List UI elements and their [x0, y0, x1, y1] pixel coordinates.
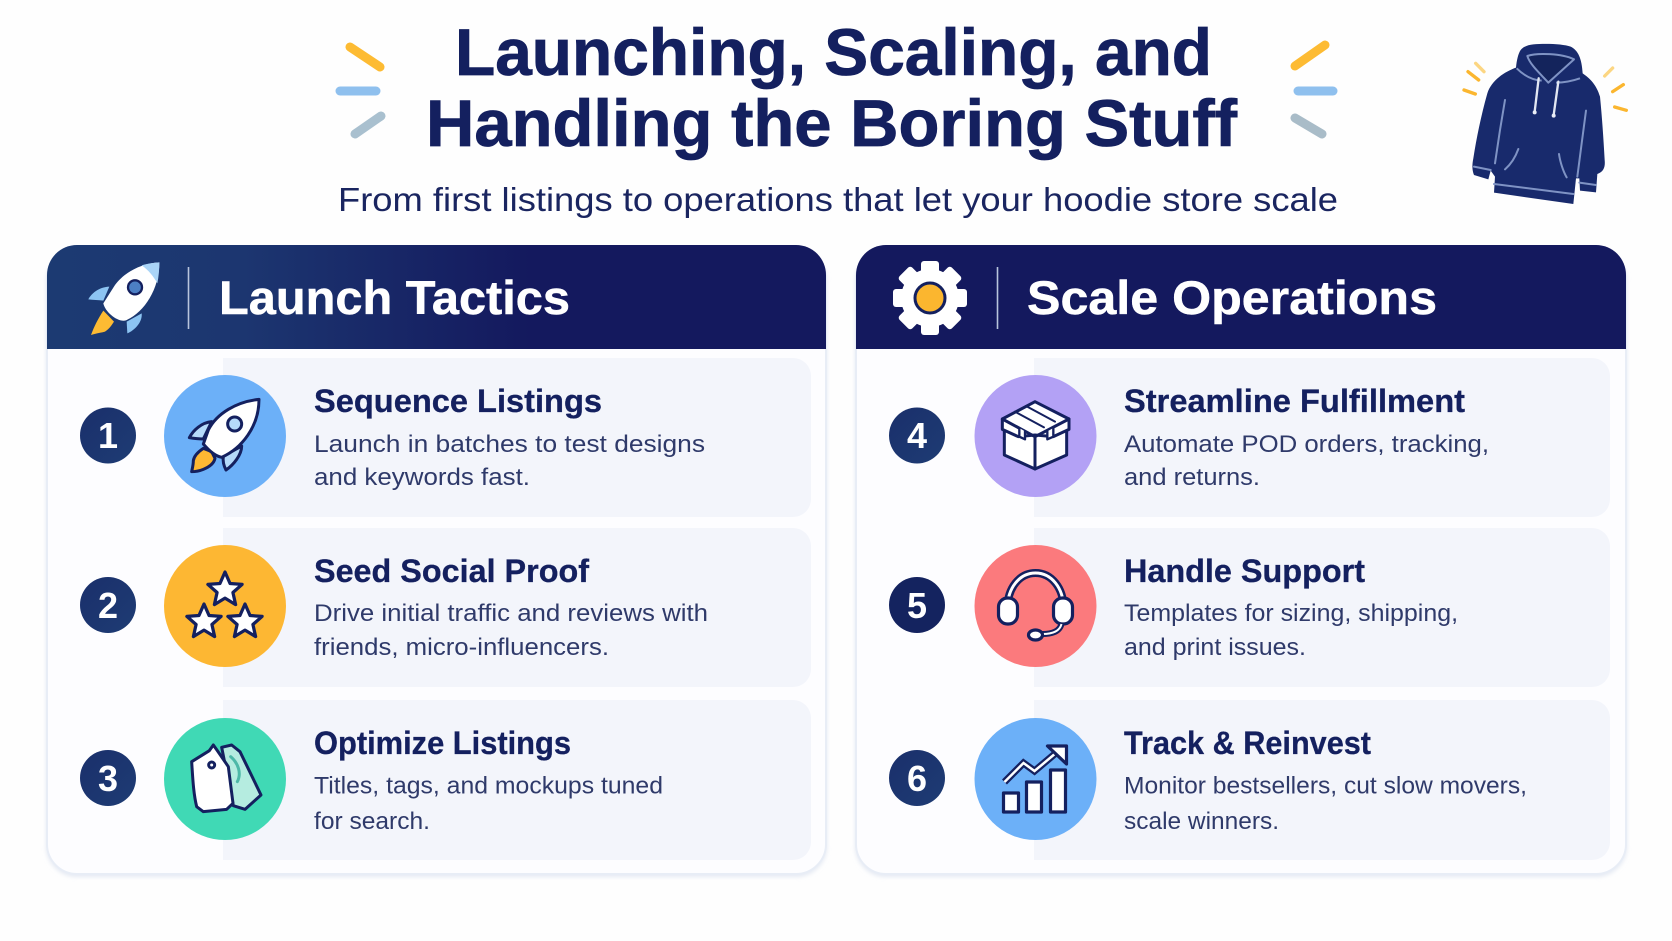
icon: headset [974, 545, 1096, 667]
text: Streamline Fulfillment: and returns. [1124, 464, 1260, 491]
icon: price tags [164, 718, 286, 840]
decorative dashes right of title [1295, 45, 1333, 134]
icon: stars [164, 545, 286, 667]
text: Sequence Listings: Sequence Listings [314, 383, 602, 419]
text: Optimize Listings: Titles, tags, and mockups tuned [314, 772, 663, 800]
row 3: Optimize Listings [80, 700, 811, 860]
row 1: Sequence Listings [80, 358, 811, 517]
number badge 4: 4 [907, 415, 927, 456]
number badge 1: 1 [98, 415, 118, 456]
number badge 4 [889, 408, 945, 464]
row 6: Track & Reinvest [889, 700, 1610, 860]
text: Handle Support [1124, 553, 1458, 661]
text: Streamline Fulfillment: Automate POD orders, tracking, [1124, 431, 1489, 458]
panel: Launch Tactics [47, 245, 826, 874]
text: Optimize Listings [314, 725, 663, 835]
number badge 3 [80, 750, 136, 806]
text: Track & Reinvest: scale winners. [1124, 808, 1279, 835]
panel header: Launch Tactics: Launch Tactics [219, 271, 570, 324]
panel header: Launch Tactics [47, 245, 826, 349]
number badge 5: 5 [907, 585, 927, 626]
text: Seed Social Proof: Seed Social Proof [314, 553, 589, 589]
number badge 3: 3 [98, 758, 118, 799]
text: Optimize Listings: Optimize Listings [314, 725, 571, 761]
panel header: Scale Operations [856, 245, 1626, 349]
number badge 5 [889, 577, 945, 633]
text: Handle Support: Handle Support [1124, 553, 1365, 589]
text: Streamline Fulfillment: Streamline Fulfillment [1124, 383, 1465, 419]
icon: gear [893, 261, 967, 335]
text: Sequence Listings: Launch in batches to test designs [314, 431, 705, 458]
panel: Scale Operations [856, 245, 1626, 874]
title: Launching, Scaling, and [455, 15, 1212, 89]
text: Track & Reinvest: Monitor bestsellers, cut slow movers, [1124, 772, 1527, 800]
text: Sequence Listings: and keywords fast. [314, 464, 530, 491]
title [426, 15, 1238, 160]
icon: white rocket [88, 262, 159, 335]
row 2: Seed Social Proof [80, 528, 811, 687]
text: Handle Support: and print issues. [1124, 634, 1306, 661]
icon: hoodie with sparks [1464, 44, 1626, 204]
icon: growth chart [974, 718, 1096, 840]
row 4: Streamline Fulfillment [889, 358, 1610, 517]
text: Track & Reinvest [1124, 725, 1527, 835]
number badge 6: 6 [907, 758, 927, 799]
text: Streamline Fulfillment [1124, 383, 1489, 491]
text: Seed Social Proof: Drive initial traffic and reviews with [314, 600, 708, 627]
icon: box [974, 375, 1096, 497]
number badge 2 [80, 577, 136, 633]
decorative dashes left of title [340, 47, 381, 134]
title: Handling the Boring Stuff [426, 86, 1238, 160]
subtitle: From first listings to operations that let your hoodie store scale [338, 181, 1338, 218]
text: Sequence Listings [314, 383, 705, 491]
text: Handle Support: Templates for sizing, shipping, [1124, 600, 1458, 627]
number badge 6 [889, 750, 945, 806]
panel header: Scale Operations: Scale Operations [1027, 271, 1437, 324]
row 5: Handle Support [889, 528, 1610, 687]
icon: rocket [164, 375, 286, 497]
text: Seed Social Proof [314, 553, 708, 661]
text: Track & Reinvest: Track & Reinvest [1124, 725, 1371, 761]
number badge 1 [80, 408, 136, 464]
text: Seed Social Proof: friends, micro-influencers. [314, 634, 609, 661]
text: Optimize Listings: for search. [314, 808, 430, 835]
number badge 2: 2 [98, 585, 118, 626]
